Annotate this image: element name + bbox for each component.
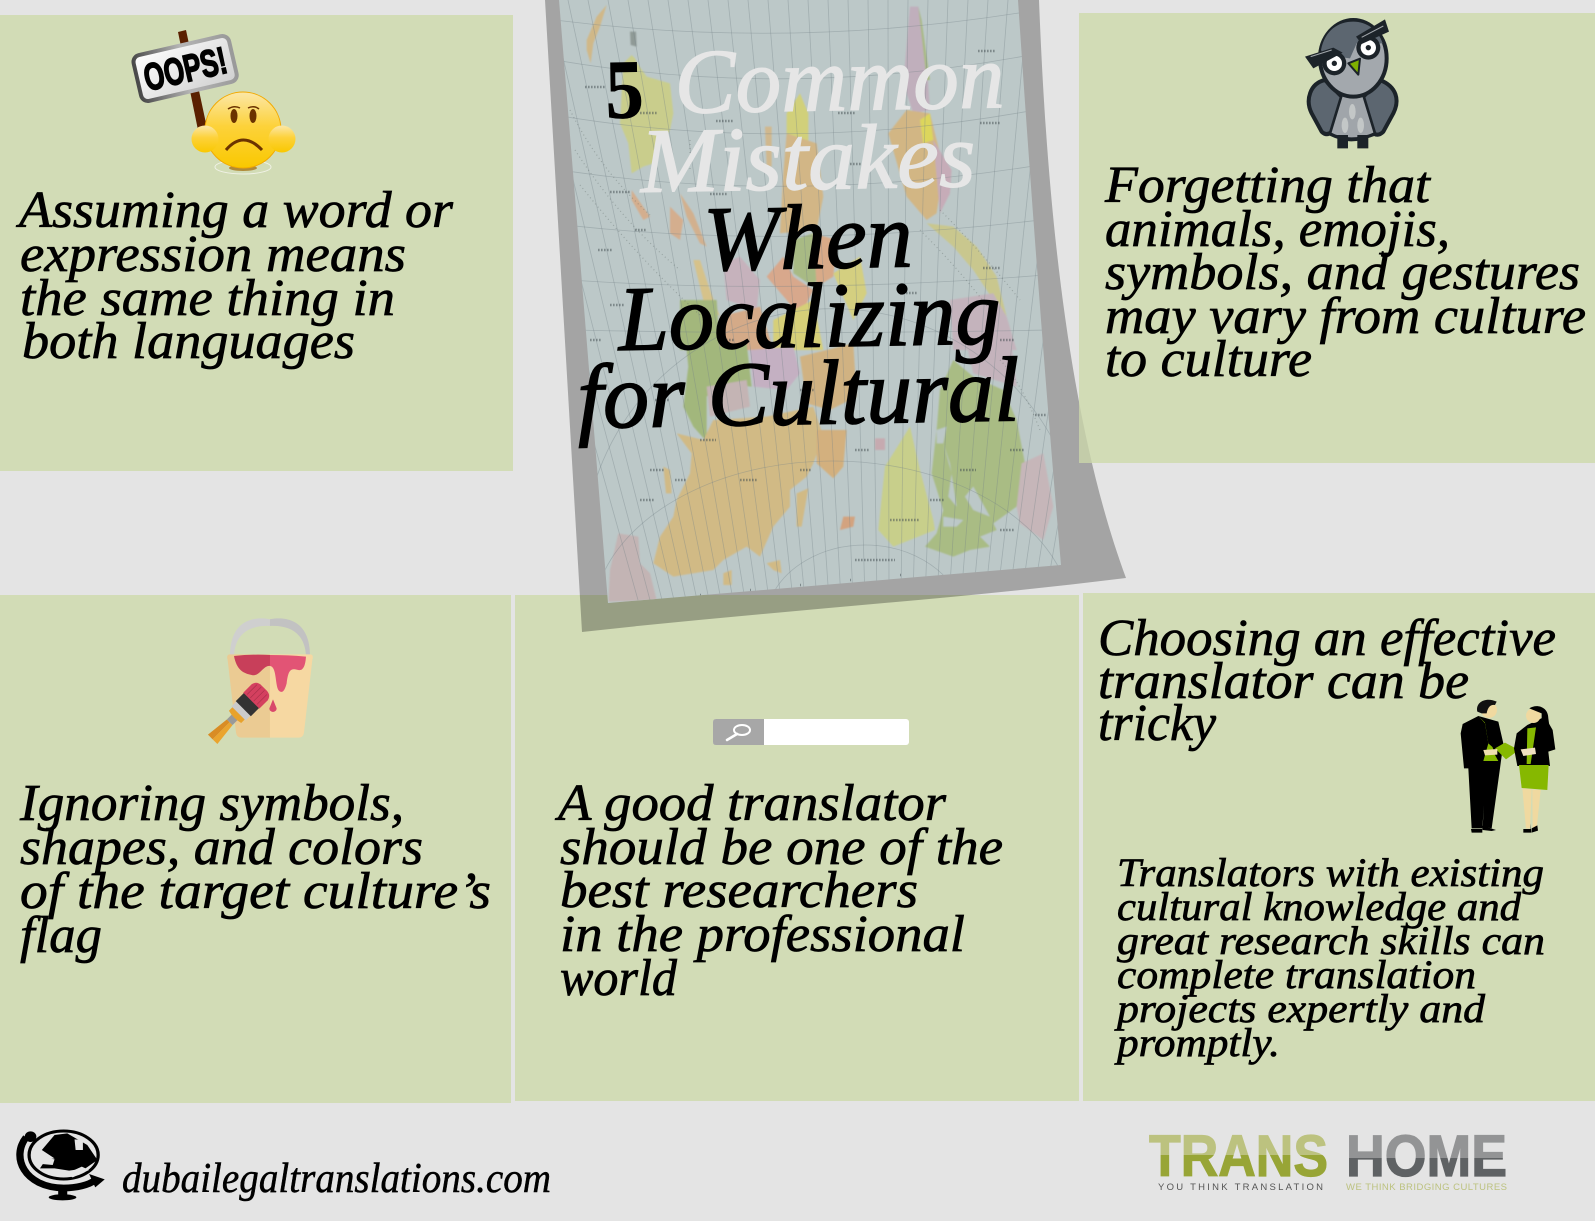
- text: choosing translator: Choosing an effective: [1098, 610, 1556, 667]
- map labels and island specks: [585, 51, 1047, 595]
- title: [577, 25, 1020, 448]
- text: good translator: in the professional: [560, 906, 965, 963]
- panel: assuming a word: [0, 15, 513, 471]
- text: good translator: [555, 775, 1003, 1007]
- title black words: When: [703, 184, 913, 290]
- title black words: Localizing: [616, 261, 1001, 370]
- map graticule: [560, 0, 1058, 600]
- icon: paint bucket and brush: [205, 618, 313, 747]
- logo: trans home: TRANS: [1149, 1124, 1328, 1189]
- text: translators paragraph: cultural knowledge and: [1117, 884, 1522, 929]
- text: good translator: A good translator: [555, 775, 947, 832]
- text: ignoring symbols: shapes, and colors: [20, 819, 423, 876]
- text: forgetting animals: [1104, 157, 1586, 388]
- text: good translator: best researchers: [560, 862, 918, 919]
- logo: trans home: HOME: [1346, 1124, 1507, 1189]
- title white words: Common: [674, 25, 1005, 133]
- title black words: [577, 184, 1020, 448]
- icon: oops sign and sad face: OOPS!: [140, 40, 231, 100]
- logo: trans home: [1149, 1124, 1507, 1193]
- icon: oops sign and sad face: [132, 30, 296, 174]
- title white words: Mistakes: [638, 104, 976, 212]
- text: translators paragraph: Translators with existing: [1117, 850, 1544, 895]
- text: translators paragraph: [1114, 850, 1545, 1065]
- title black words: for Cultural: [577, 338, 1020, 448]
- text: assuming a word: expression means: [20, 226, 406, 283]
- text: assuming a word: both languages: [22, 313, 355, 370]
- icon: two business people: [1461, 700, 1555, 833]
- panel: good translator: [515, 595, 1079, 1101]
- panel: forgetting animals: [1079, 13, 1595, 463]
- text: good translator: should be one of the: [560, 819, 1003, 876]
- text: forgetting animals: may vary from culture: [1105, 288, 1586, 345]
- text: website: dubailegaltranslations.com: [122, 1156, 551, 1202]
- text: forgetting animals: symbols, and gestures: [1105, 244, 1580, 301]
- title white words: [638, 25, 1005, 212]
- title number 5: 5: [605, 43, 644, 137]
- panel: choosing translator: [1083, 593, 1595, 1101]
- curled world map poster: [545, 0, 1126, 632]
- text: translators paragraph: promptly.: [1114, 1020, 1280, 1065]
- text: forgetting animals: to culture: [1105, 331, 1312, 388]
- text: assuming a word: the same thing in: [20, 270, 395, 327]
- logo: trans home: YOU THINK TRANSLATION: [1158, 1182, 1323, 1193]
- text: translators paragraph: complete translation: [1117, 952, 1476, 997]
- icon: owl with glasses: [1305, 19, 1397, 148]
- text: assuming a word: Assuming a word or: [16, 182, 454, 239]
- text: ignoring symbols: [19, 775, 491, 964]
- text: translators paragraph: projects expertly and: [1114, 986, 1486, 1031]
- lower map land: [608, 330, 1053, 602]
- text: ignoring symbols: of the target culture’s: [20, 863, 491, 920]
- text: choosing translator: [1098, 610, 1556, 752]
- text: translators paragraph: great research skills can: [1117, 918, 1545, 963]
- text: choosing translator: tricky: [1098, 695, 1217, 752]
- text: forgetting animals: Forgetting that: [1104, 157, 1432, 214]
- text: assuming a word: [16, 182, 454, 370]
- text: ignoring symbols: flag: [20, 907, 102, 964]
- upper map land: [587, 5, 1017, 350]
- panel: ignoring symbols: [0, 595, 511, 1103]
- text: good translator: world: [560, 950, 678, 1007]
- text: choosing translator: translator can be: [1098, 653, 1469, 710]
- text: forgetting animals: animals, emojis,: [1105, 201, 1450, 258]
- logo: trans home: WE THINK BRIDGING CULTURES: [1346, 1182, 1507, 1193]
- icon: globe: [20, 1131, 105, 1200]
- text: ignoring symbols: Ignoring symbols,: [19, 775, 404, 832]
- icon: search bar: [713, 719, 909, 745]
